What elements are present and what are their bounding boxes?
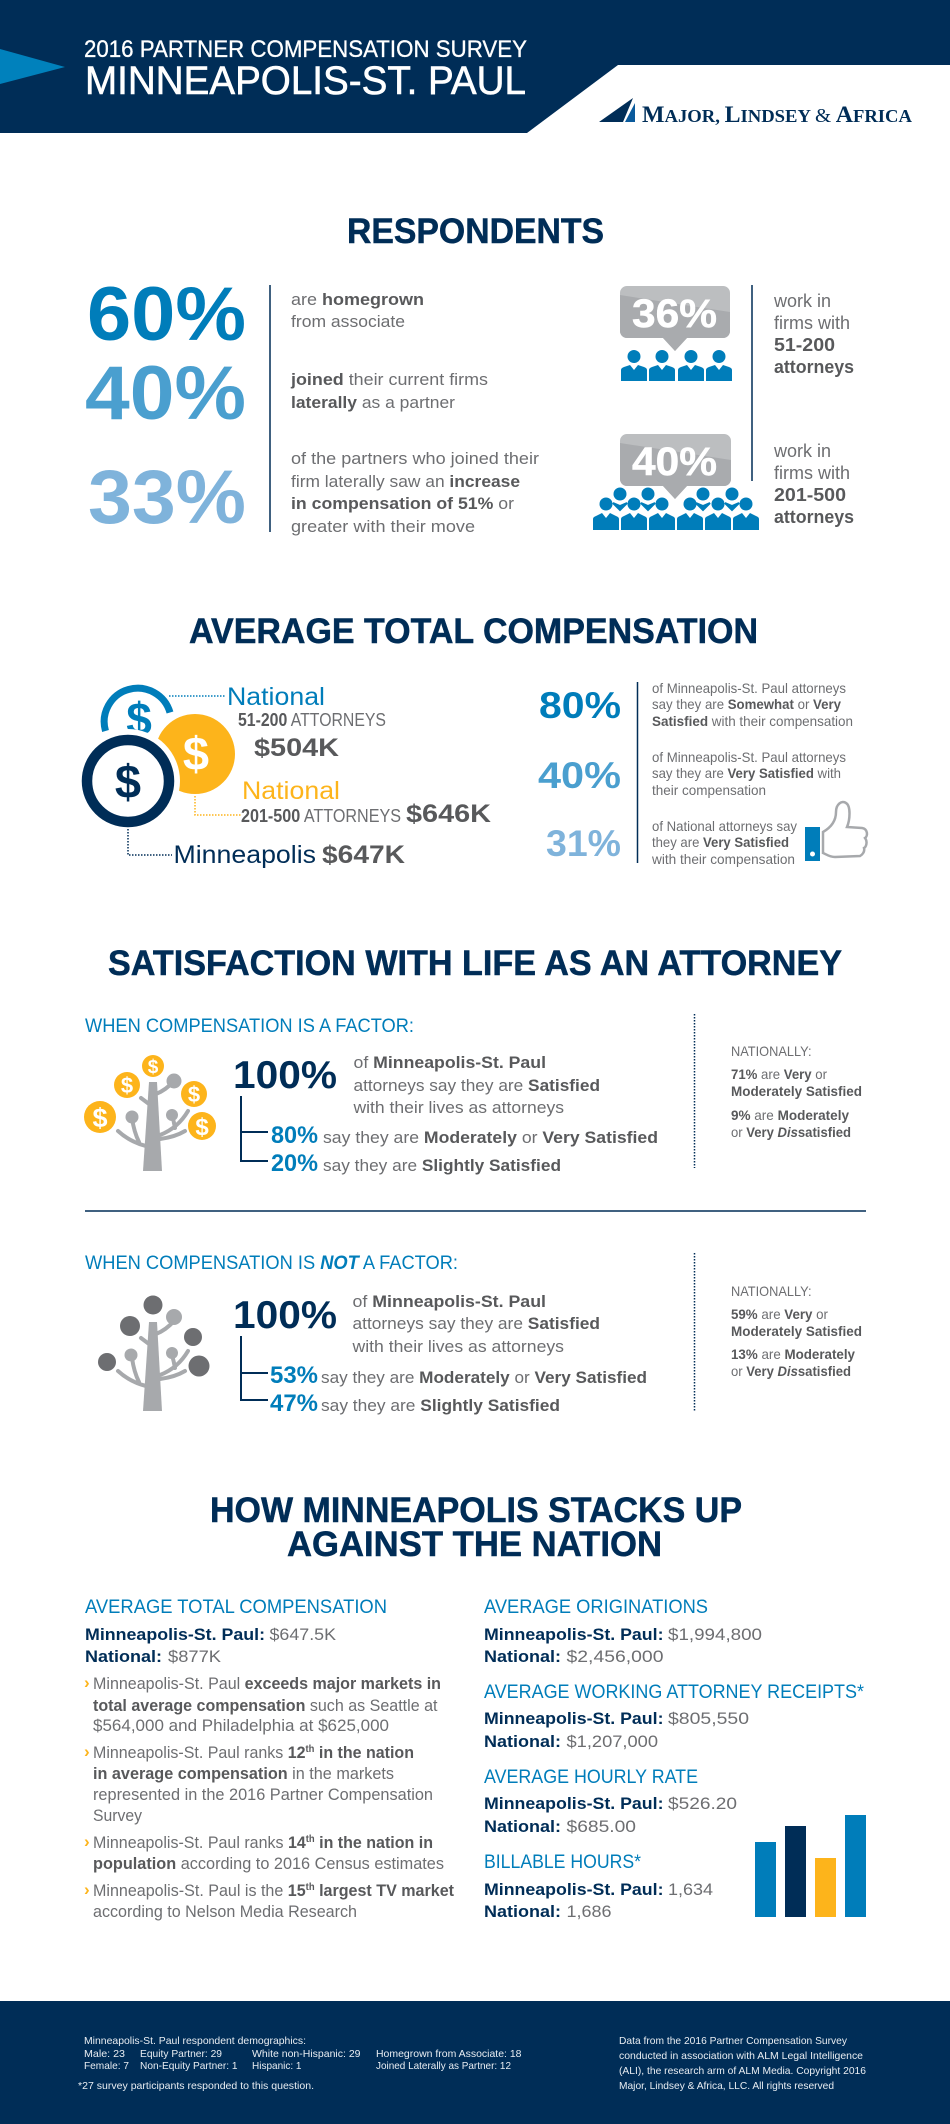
text: homegrown bbox=[291, 290, 424, 331]
block: average hourly rate: $526.20 bbox=[668, 1794, 737, 1813]
block: billable hours: Minneapolis-St. Paul: bbox=[484, 1880, 664, 1899]
footer: source: Major, Lindsey & Africa, LLC. All rights reserved bbox=[619, 2080, 834, 2092]
block: average hourly rate: National: bbox=[484, 1817, 561, 1836]
footer: demographics: Non-Equity Partner: 1 bbox=[140, 2060, 238, 2072]
block: average hourly rate bbox=[484, 1767, 737, 1836]
text: nationally: Moderately Satisfied bbox=[731, 1323, 862, 1339]
footer: demographics: *27 survey participants responded to this question. bbox=[78, 2080, 314, 2092]
text: nationally bbox=[731, 1283, 862, 1379]
bullet list bbox=[84, 1673, 454, 1921]
stat 40%: 40% bbox=[538, 755, 621, 796]
icon: ten people bbox=[593, 488, 759, 530]
icon: money tree: $ bbox=[148, 1057, 159, 1078]
bullet list: represented in the 2016 Partner Compensation bbox=[93, 1785, 433, 1804]
bullet list: in the nation in bbox=[315, 1833, 433, 1852]
bullet list: th bbox=[306, 1744, 314, 1755]
stat 31%: 31% bbox=[546, 823, 621, 864]
text: nationally: 9% are Moderately bbox=[731, 1107, 849, 1123]
text: national very satisfied: they are Very Satisfied bbox=[652, 834, 789, 850]
footer: demographics: Female: 7 bbox=[84, 2060, 129, 2072]
text: satisfied bbox=[352, 1053, 600, 1117]
block: average originations bbox=[484, 1597, 762, 1666]
text: very satisfied bbox=[652, 749, 846, 798]
footer bbox=[0, 2001, 950, 2124]
block: working attorney receipts: $1,207,000 bbox=[566, 1732, 658, 1751]
icon: bar chart bbox=[755, 1815, 866, 1917]
stat 100%: 100% bbox=[233, 1054, 337, 1097]
bullet list: in the nation bbox=[314, 1743, 414, 1762]
icon: money tree bbox=[84, 1055, 216, 1171]
block: average originations: $1,994,800 bbox=[668, 1625, 762, 1644]
text: national very satisfied: with their compensation bbox=[651, 851, 795, 867]
text: satisfied: with their lives as attorneys bbox=[352, 1098, 564, 1117]
text: national very satisfied bbox=[651, 818, 797, 867]
text: joined laterally bbox=[290, 370, 488, 412]
header banner bbox=[0, 0, 950, 133]
panel: respondents left bbox=[85, 272, 539, 540]
values bbox=[85, 1625, 337, 1666]
footer: demographics: Joined Laterally as Partner: 12 bbox=[376, 2060, 511, 2072]
footer: demographics: Male: 23 bbox=[84, 2048, 125, 2060]
text: nationally: 71% are Very or bbox=[731, 1066, 827, 1082]
text: joined laterally: joined their current firms bbox=[290, 370, 488, 389]
heading: how minneapolis stacks up bbox=[210, 1491, 742, 1564]
text: increase in compensation: in compensation of 51% or bbox=[291, 494, 514, 513]
stat row: 53%: say they are Moderately or Very Satisfied bbox=[321, 1368, 647, 1387]
subheading: average total compensation: AVERAGE TOTAL COMPENSATION bbox=[85, 1597, 387, 1618]
values: $877K bbox=[168, 1647, 222, 1666]
text: somewhat or very satisfied: say they are Somewhat or Very bbox=[652, 696, 841, 712]
text: homegrown: from associate bbox=[291, 312, 405, 331]
stat row: 20% bbox=[271, 1150, 561, 1177]
footer: demographics bbox=[78, 2035, 522, 2092]
panel: compensation coins bbox=[76, 683, 491, 869]
text: nationally: 13% are Moderately bbox=[731, 1346, 855, 1362]
panel: firm size bbox=[593, 285, 854, 530]
label: national 201-500: $646K bbox=[406, 800, 491, 828]
icon: thumbs up bbox=[805, 802, 867, 861]
block: billable hours: National: bbox=[484, 1902, 561, 1921]
stat row: 80% bbox=[271, 1122, 658, 1149]
stat row: 20%: 20% bbox=[271, 1150, 318, 1177]
text: increase in compensation: greater with their move bbox=[291, 517, 475, 536]
block: billable hours: 1,686 bbox=[566, 1902, 612, 1921]
values: $647.5K bbox=[270, 1625, 337, 1644]
label: minneapolis: Minneapolis bbox=[174, 841, 316, 869]
text: very satisfied: say they are Very Satisfied with bbox=[652, 765, 841, 781]
text: nationally bbox=[731, 1043, 862, 1140]
logo: Major, Lindsey & Africa: MAJOR, LINDSEY & AFRICA bbox=[642, 102, 912, 127]
footer: source: (ALI), the research arm of ALM Media. Copyright 2016 bbox=[619, 2065, 866, 2077]
block: average originations: $2,456,000 bbox=[566, 1647, 664, 1666]
icon: speech bubble 36% bbox=[620, 286, 730, 351]
icon: coins: $ bbox=[183, 727, 209, 780]
block: working attorney receipts: $805,550 bbox=[668, 1709, 749, 1728]
text: 51-200 attorneys: firms with bbox=[774, 313, 850, 333]
block: working attorney receipts: National: bbox=[484, 1732, 561, 1751]
icon: coins: $ bbox=[115, 755, 141, 808]
stat row: 47% bbox=[270, 1390, 560, 1417]
stat row: 80%: say they are Moderately or Very Satisfied bbox=[323, 1128, 658, 1147]
footer: source bbox=[619, 2035, 866, 2092]
label: national 51-200: 51-200 ATTORNEYS bbox=[238, 710, 386, 730]
bullet list: › bbox=[84, 1832, 90, 1851]
block: billable hours: 1,634 bbox=[668, 1880, 713, 1899]
text: 201-500 attorneys: attorneys bbox=[774, 507, 854, 527]
text: 51-200 attorneys: work in bbox=[773, 291, 831, 311]
stat row: 47%: say they are Slightly Satisfied bbox=[321, 1396, 560, 1415]
text: 51-200 attorneys: attorneys bbox=[774, 357, 854, 377]
footer: source: Data from the 2016 Partner Compensation Survey bbox=[619, 2035, 848, 2047]
text: satisfied: attorneys say they are Satisfied bbox=[354, 1076, 600, 1095]
label: minneapolis: $647K bbox=[322, 841, 405, 869]
stat 80%: 80% bbox=[539, 685, 621, 726]
label: national 201-500: National bbox=[242, 777, 340, 805]
icon: speech bubble 40% bbox=[620, 434, 731, 499]
label: minneapolis bbox=[174, 841, 405, 869]
label: national 201-500 bbox=[241, 777, 491, 828]
panel: right comparison column bbox=[484, 1597, 866, 1921]
stat row: 53% bbox=[270, 1362, 647, 1389]
footer: demographics: White non-Hispanic: 29 bbox=[252, 2048, 361, 2060]
bullet list: Survey bbox=[93, 1806, 142, 1825]
footer: demographics: Equity Partner: 29 bbox=[140, 2048, 222, 2060]
text: increase in compensation: of the partners who joined their bbox=[291, 449, 539, 468]
heading: satisfaction with life: SATISFACTION WITH LIFE AS AN ATTORNEY bbox=[108, 944, 842, 983]
footer: source: conducted in association with ALM Legal Intelligence bbox=[619, 2050, 863, 2062]
stat 40%: 40% bbox=[85, 351, 246, 436]
text: 201-500 attorneys bbox=[773, 441, 854, 527]
block: working attorney receipts: Minneapolis-St. Paul: bbox=[484, 1709, 664, 1728]
text: nationally: NATIONALLY: bbox=[731, 1283, 812, 1299]
text: nationally: or Very Dissatisfied bbox=[731, 1363, 851, 1379]
text: nationally: Moderately Satisfied bbox=[731, 1083, 862, 1099]
block: billable hours: BILLABLE HOURS* bbox=[484, 1852, 642, 1873]
text: joined laterally: laterally as a partner bbox=[291, 393, 455, 412]
text: 201-500 attorneys: 201-500 bbox=[774, 485, 846, 505]
bullet list: in average compensation in the markets bbox=[93, 1764, 394, 1783]
panel: left comparison column bbox=[84, 1597, 454, 1921]
heading: how minneapolis stacks up: AGAINST THE NATION bbox=[287, 1525, 662, 1564]
text: 201-500 attorneys: firms with bbox=[774, 463, 850, 483]
text: nationally: or Very Dissatisfied bbox=[731, 1124, 851, 1140]
label: national 51-200: National bbox=[227, 683, 325, 711]
text: very satisfied: their compensation bbox=[652, 782, 766, 798]
bullet list: total average compensation such as Seattle at bbox=[93, 1696, 438, 1715]
bullet list: › bbox=[84, 1880, 90, 1899]
text: somewhat or very satisfied bbox=[652, 680, 853, 729]
label: national 51-200: $504K bbox=[254, 734, 339, 762]
block: average hourly rate: AVERAGE HOURLY RATE bbox=[484, 1767, 698, 1788]
city title: MINNEAPOLIS-ST. PAUL bbox=[85, 59, 526, 103]
bullet list: largest TV market bbox=[315, 1881, 454, 1900]
text: somewhat or very satisfied: of Minneapolis-St. Paul attorneys bbox=[652, 680, 846, 696]
text: satisfied: of Minneapolis-St. Paul bbox=[352, 1292, 546, 1311]
text: increase in compensation: firm laterally saw an increase bbox=[291, 472, 520, 491]
survey title: 2016 PARTNER COMPENSATION SURVEY bbox=[84, 36, 527, 63]
icon: money tree: $ bbox=[188, 1082, 200, 1107]
text: satisfied: of Minneapolis-St. Paul bbox=[354, 1053, 546, 1072]
subheading: WHEN COMPENSATION IS A FACTOR: bbox=[85, 1016, 414, 1037]
text: increase in compensation bbox=[291, 449, 539, 536]
bullet list: th bbox=[306, 1882, 315, 1893]
panel: compensation satisfaction bbox=[538, 680, 867, 867]
label: national 201-500: 201-500 ATTORNEYS bbox=[241, 806, 401, 826]
text: homegrown: are homegrown bbox=[291, 290, 424, 309]
text: 51-200 attorneys: 51-200 bbox=[774, 335, 835, 355]
text: satisfied bbox=[351, 1292, 600, 1356]
text: 201-500 attorneys: work in bbox=[773, 441, 831, 461]
label: national 51-200 bbox=[227, 683, 386, 762]
heading: average total compensation: AVERAGE TOTAL COMPENSATION bbox=[189, 612, 758, 651]
panel: when compensation is not a factor bbox=[85, 1253, 862, 1417]
text: satisfied: attorneys say they are Satisfied bbox=[352, 1314, 600, 1333]
footer: demographics: Minneapolis-St. Paul respondent demographics: bbox=[84, 2035, 306, 2047]
bullet list: according to Nelson Media Research bbox=[93, 1902, 357, 1921]
stat 33%: 33% bbox=[88, 455, 246, 540]
block: average originations: Minneapolis-St. Paul: bbox=[484, 1625, 664, 1644]
values: Minneapolis-St. Paul: bbox=[85, 1625, 265, 1644]
bullet list: $564,000 and Philadelphia at $625,000 bbox=[93, 1716, 389, 1735]
stat 60%: 60% bbox=[87, 272, 246, 357]
block: average hourly rate: $685.00 bbox=[566, 1817, 636, 1836]
icon: money tree: $ bbox=[195, 1114, 209, 1141]
stat row: 47%: 47% bbox=[270, 1390, 318, 1417]
bullet list: Minneapolis-St. Paul is the 15 bbox=[93, 1881, 307, 1900]
stat row: 80%: 80% bbox=[271, 1122, 318, 1149]
icon: speech bubble 36%: 36% bbox=[632, 292, 717, 336]
block: working attorney receipts bbox=[484, 1682, 865, 1751]
icon: coins: $ bbox=[126, 693, 152, 745]
subheading: WHEN COMPENSATION IS NOT A FACTOR: bbox=[85, 1253, 458, 1274]
icon: coins bbox=[76, 688, 240, 833]
icon: money tree: $ bbox=[92, 1103, 108, 1133]
text: nationally: 59% are Very or bbox=[731, 1306, 828, 1322]
block: working attorney receipts: AVERAGE WORKING ATTORNEY RECEIPTS* bbox=[484, 1682, 865, 1703]
block: average originations: AVERAGE ORIGINATIONS bbox=[484, 1597, 708, 1618]
values: National: bbox=[85, 1647, 162, 1666]
bullet list: › bbox=[84, 1742, 90, 1761]
heading: respondents: RESPONDENTS bbox=[347, 212, 604, 251]
stat row: 20%: say they are Slightly Satisfied bbox=[323, 1156, 561, 1175]
panel: when compensation is a factor bbox=[84, 1014, 862, 1177]
stat 100%: 100% bbox=[233, 1294, 337, 1337]
text: nationally: NATIONALLY: bbox=[731, 1043, 812, 1059]
heading: how minneapolis stacks up: HOW MINNEAPOLIS STACKS UP bbox=[210, 1491, 742, 1530]
bullet list: › bbox=[84, 1673, 90, 1692]
block: average originations: National: bbox=[484, 1647, 561, 1666]
bullet list: Minneapolis-St. Paul exceeds major markets in bbox=[93, 1674, 441, 1693]
text: very satisfied: of Minneapolis-St. Paul attorneys bbox=[652, 749, 846, 765]
stat row: 53%: 53% bbox=[270, 1362, 318, 1389]
text: satisfied: with their lives as attorneys bbox=[351, 1337, 564, 1356]
bullet list: th bbox=[306, 1834, 315, 1845]
bullet list: population according to 2016 Census estimates bbox=[93, 1854, 444, 1873]
icon: four people bbox=[621, 350, 732, 381]
footer: demographics: Homegrown from Associate: 18 bbox=[376, 2048, 522, 2060]
footer: demographics: Hispanic: 1 bbox=[252, 2060, 302, 2072]
text: national very satisfied: of National attorneys say bbox=[652, 818, 797, 834]
block: billable hours bbox=[484, 1852, 713, 1921]
text: somewhat or very satisfied: Satisfied with their compensation bbox=[652, 713, 853, 729]
icon: speech bubble 40%: 40% bbox=[632, 440, 717, 484]
text: 51-200 attorneys bbox=[773, 291, 854, 377]
bullet list: Minneapolis-St. Paul ranks 14 bbox=[93, 1833, 307, 1852]
bullet list: Minneapolis-St. Paul ranks 12 bbox=[93, 1743, 307, 1762]
icon: money tree: $ bbox=[121, 1073, 133, 1098]
block: average hourly rate: Minneapolis-St. Paul: bbox=[484, 1794, 664, 1813]
icon: plain tree bbox=[98, 1296, 210, 1411]
icon: blue arrow bbox=[0, 49, 65, 84]
